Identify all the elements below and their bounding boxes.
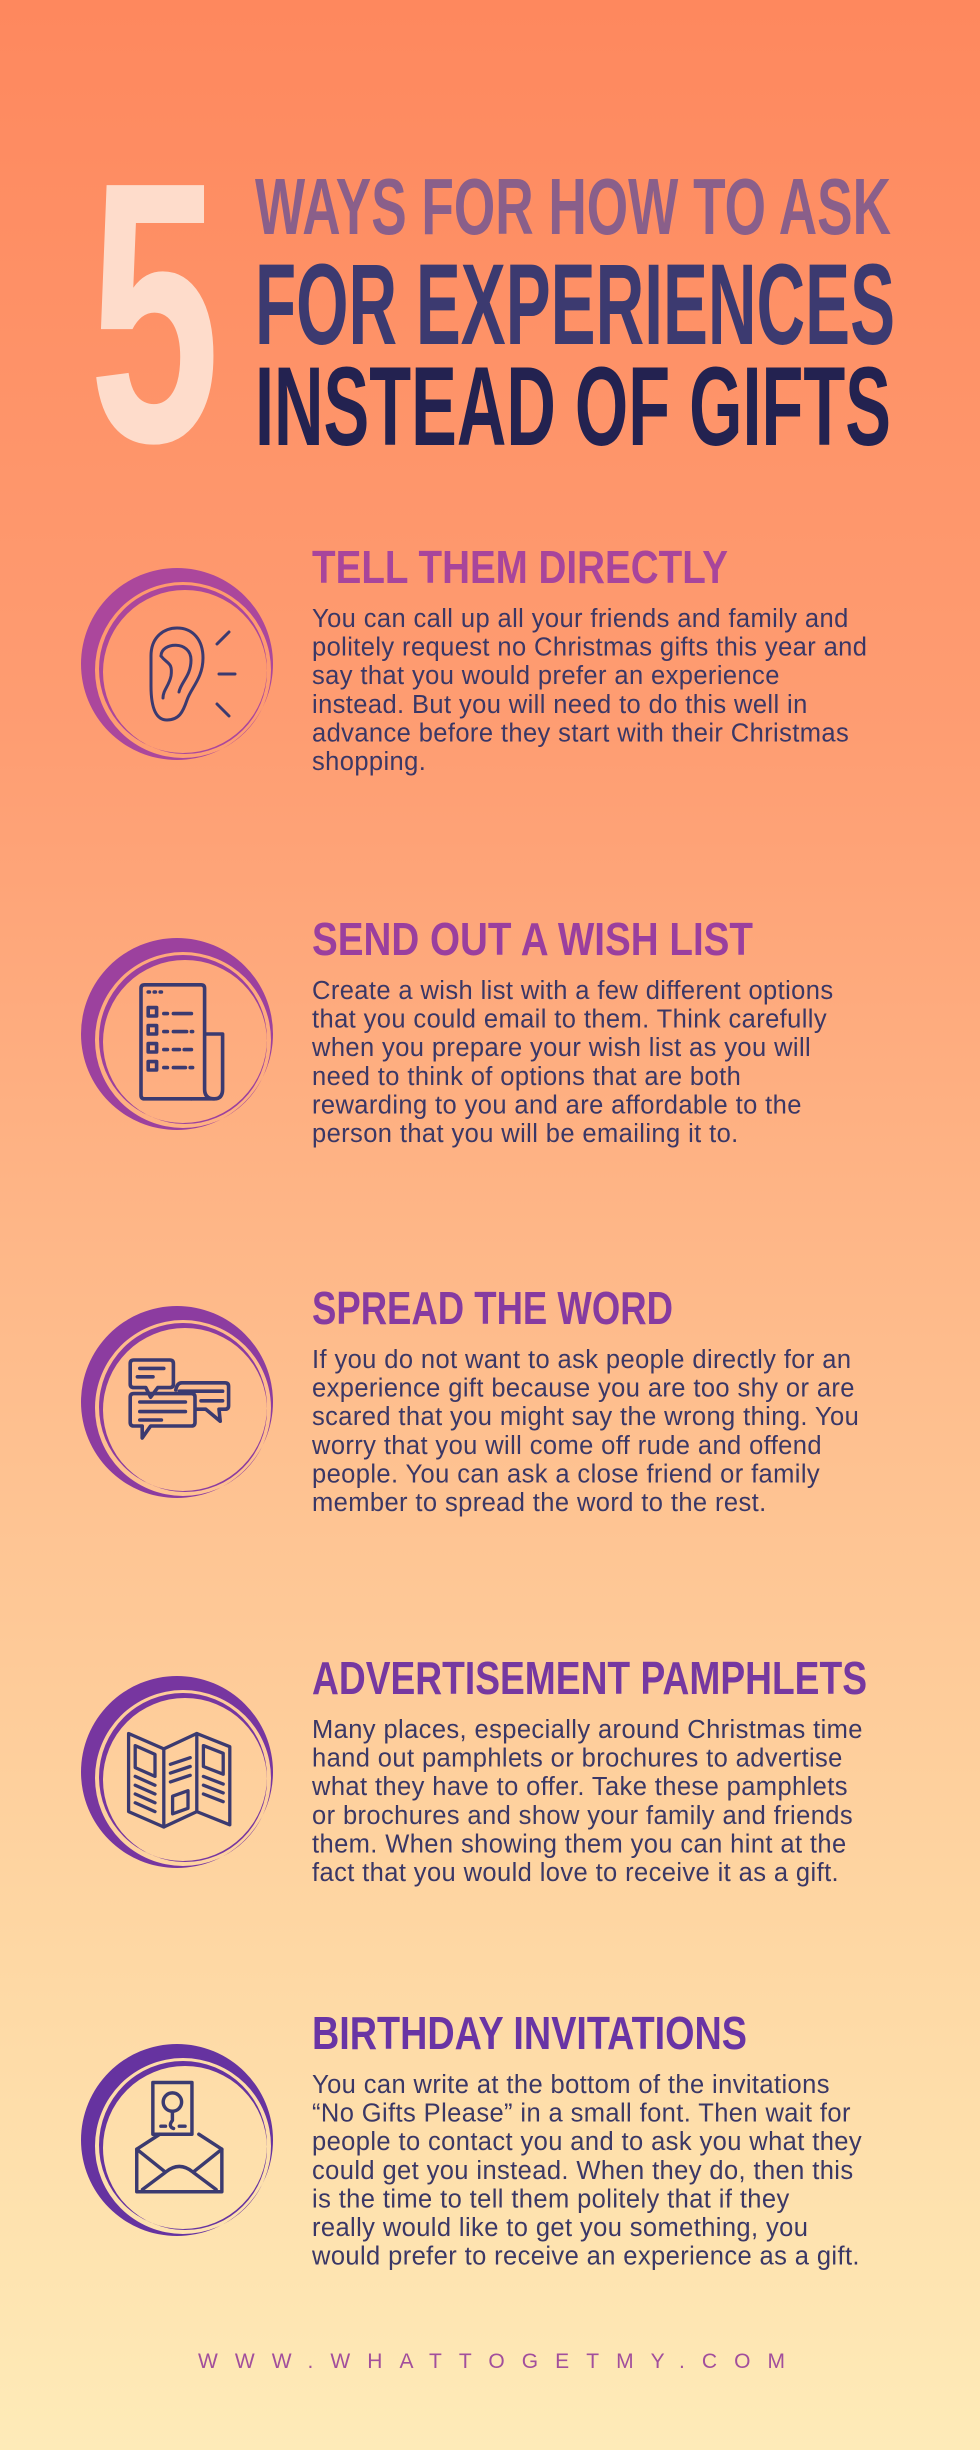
text block: really would like to get you something, you [312,2214,808,2242]
text block: shopping. [312,748,426,776]
text block: advance before they start with their Christmas [312,719,849,747]
text block: If you do not want to ask people directly for an [312,1346,851,1374]
big number 5: 5 [89,104,220,520]
icon ring [81,1676,273,1868]
panel: send out a wish list [81,913,841,1148]
icon ring [81,2044,273,2236]
text block: what they have to offer. Take these pamphlets [311,1773,848,1801]
text block: fact that you would love to receive it as a gift. [312,1859,839,1887]
text block: rewarding to you and are affordable to the [312,1091,802,1119]
heading: BIRTHDAY INVITATIONS [312,2007,747,2059]
text block: would prefer to receive an experience as a gift. [311,2243,860,2271]
text block: You can call up all your friends and family and [312,605,849,633]
text block: worry that you will come off rude and offend [311,1432,822,1460]
icon ring [81,1306,273,1498]
text block: member to spread the word to the rest. [312,1489,767,1517]
heading: TELL THEM DIRECTLY [312,541,728,593]
text block: person that you will be emailing it to. [312,1120,739,1148]
panel: birthday invitations [81,2007,870,2271]
text block: that you could email to them. Think carefully [312,1006,827,1034]
icon: wish list [141,985,223,1099]
text block: experience gift because you are too shy or are [312,1375,855,1403]
heading: SEND OUT A WISH LIST [312,913,753,965]
text block: Many places, especially around Christmas time [312,1716,863,1744]
text block: say that you would prefer an experience [312,662,780,690]
text block: politely request no Christmas gifts this year and [312,634,867,662]
text block: hand out pamphlets or brochures to advertise [312,1745,843,1773]
title [89,104,895,520]
icon: speech bubbles [130,1360,229,1438]
heading: SPREAD THE WORD [312,1282,673,1334]
text block: “No Gifts Please” in a small font. Then wait for [312,2100,851,2128]
icon ring [81,568,273,760]
icon: ear [151,628,235,720]
text block: You can write at the bottom of the invitations [312,2071,830,2099]
heading: ADVERTISEMENT PAMPHLETS [312,1652,867,1704]
text block: people to contact you and to ask you what they [312,2128,862,2156]
panel: advertisement pamphlets [81,1652,870,1887]
text block: when you prepare your wish list as you will [311,1034,811,1062]
panel: spread the word [81,1282,867,1517]
footer url: WWW.WHATTOGETMY.COM [198,2350,785,2373]
text block: need to think of options that are both [312,1063,741,1091]
icon ring [81,938,273,1130]
icon: pamphlet [129,1734,230,1827]
text block: or brochures and show your family and friends [312,1802,853,1830]
icon: invitation envelope [137,2082,222,2192]
text block: scared that you might say the wrong thing. You [312,1403,859,1431]
text block: Create a wish list with a few different options [312,977,834,1005]
text block: is the time to tell them politely that if they [312,2185,790,2213]
text block: could get you instead. When they do, then this [312,2157,854,2185]
panel: tell them directly [81,541,875,776]
text block: them. When showing them you can hint at the [312,1830,847,1858]
text block: instead. But you will need to do this well in [312,691,808,719]
text block: people. You can ask a close friend or family [312,1460,820,1488]
